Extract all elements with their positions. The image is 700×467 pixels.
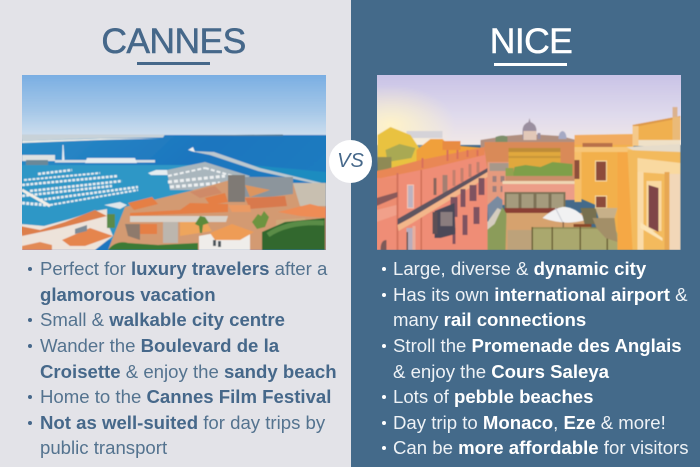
climbing plants	[484, 207, 506, 250]
salmon building	[376, 150, 487, 250]
left distant building	[406, 131, 442, 138]
bullet: affordable: Can be more affordable for visitors	[393, 437, 689, 458]
balcony	[434, 203, 455, 238]
ground-floor windows	[406, 228, 412, 250]
trellis hedge	[531, 228, 623, 250]
heading underline: Nice	[494, 63, 567, 66]
far right building	[632, 116, 680, 145]
heading: Nice: NICE	[490, 21, 572, 61]
top pier with yachts	[22, 155, 55, 161]
lower-floor windows	[450, 178, 484, 244]
distant town	[484, 142, 578, 186]
cornice roof band	[397, 168, 487, 225]
bullet: day trips: Day trip to Monaco, Eze & more!	[393, 412, 666, 432]
yellow building	[574, 134, 633, 250]
bullet: Boulevard de la Croisette	[28, 335, 337, 382]
terrace ledge	[505, 176, 577, 183]
breakwater	[190, 151, 326, 186]
bullet: Boulevard de la Croisette: Wander the Boulevard de la	[40, 335, 279, 356]
rooftop plants	[512, 162, 572, 178]
small pink building	[487, 162, 512, 205]
fortress and tower	[228, 175, 245, 202]
orange roofs	[128, 185, 326, 236]
pergola	[504, 192, 565, 213]
bullet: airport and rail: Has its own international airport &	[393, 284, 687, 304]
building walls	[130, 216, 228, 222]
bullet: luxury travelers	[28, 258, 328, 305]
bullet: Promenade des Anglais: & enjoy the Cours Saleya	[393, 361, 609, 382]
distant skyline	[480, 134, 580, 160]
foreground left buildings	[20, 209, 113, 250]
list: Cannes highlights	[28, 258, 337, 458]
badge: VS: VS	[337, 150, 364, 172]
greenery	[262, 218, 325, 250]
panel: Cannes	[0, 0, 351, 467]
panel: Nice	[351, 0, 700, 467]
moored yachts	[148, 170, 172, 175]
bullet: day trips: public transport	[40, 437, 167, 458]
terrace floor	[505, 213, 590, 250]
heading: Cannes: CANNES	[101, 21, 246, 61]
bullet: luxury travelers: Perfect for luxury travelers after a	[40, 258, 327, 279]
central yellow building	[508, 148, 560, 168]
bullet: pebble beaches: Lots of pebble beaches	[393, 386, 594, 407]
bullet: Promenade des Anglais: Stroll the Promenade des Anglais	[393, 335, 682, 356]
bullet: airport and rail	[382, 284, 688, 330]
upper-floor windows	[407, 185, 413, 208]
white villa	[199, 234, 250, 250]
bullet: Boulevard de la Croisette: Croisette & enjoy the sandy beach	[40, 361, 337, 382]
terrace furniture	[573, 224, 591, 227]
heading underline: Cannes	[137, 62, 210, 65]
list: Nice highlights	[382, 258, 689, 458]
far shore	[20, 134, 165, 141]
salmon wall	[502, 184, 578, 200]
umbrella	[542, 207, 585, 223]
bullet: airport and rail: many rail connections	[393, 309, 586, 330]
near-shore water	[20, 165, 225, 240]
marina rows	[22, 170, 138, 205]
bullet: dynamic city: Large, diverse & dynamic city	[393, 258, 646, 279]
photo: Cannes harbour	[22, 75, 326, 250]
photo: Nice rooftops	[377, 75, 681, 250]
orange rear building	[416, 139, 484, 170]
bullet: day trips	[28, 412, 326, 458]
bullet: luxury travelers: glamorous vacation	[40, 284, 216, 305]
bullet: Cannes Film Festival: Home to the Cannes Film Festival	[40, 386, 331, 407]
dome	[522, 118, 536, 139]
harbour quays	[167, 162, 250, 190]
badge: VS	[329, 140, 372, 183]
town base	[108, 180, 326, 250]
bullet: day trips: Not as well-suited for day trips by	[40, 412, 325, 432]
yellow foliage	[377, 127, 420, 168]
bullet: walkable centre: Small & walkable city centre	[40, 309, 285, 330]
bullet: Promenade des Anglais	[382, 335, 682, 382]
